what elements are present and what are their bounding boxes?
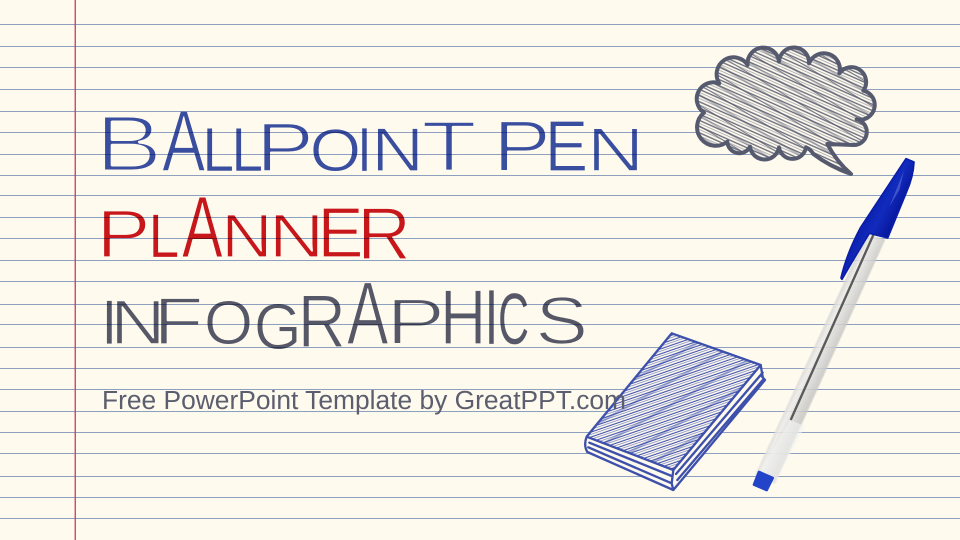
- title line: Infographics: [101, 265, 588, 364]
- ink refill: [791, 235, 873, 420]
- title line: Planner: R: [357, 192, 411, 275]
- title line: Infographics: F: [153, 283, 203, 358]
- pen cap: [841, 159, 914, 279]
- icon: scribbled book: [585, 333, 765, 490]
- title line: Infographics: I: [484, 274, 498, 361]
- title line: Planner: E: [318, 193, 364, 272]
- title line: Infographics: I: [101, 288, 118, 358]
- title line: Infographics: N: [110, 287, 166, 357]
- title line: Ballpoint Pen: T: [421, 107, 477, 187]
- title line: Ballpoint Pen: O: [310, 118, 361, 184]
- title line: Ballpoint Pen: I: [358, 115, 371, 184]
- title line: Planner: N: [221, 203, 273, 271]
- title line: Infographics: A: [347, 265, 388, 364]
- title line: Infographics: S: [535, 282, 588, 359]
- title line: Ballpoint Pen: [95, 93, 644, 190]
- title line: Infographics: P: [386, 285, 445, 358]
- title line: Ballpoint Pen: P: [493, 106, 551, 186]
- title line: Planner: [96, 178, 411, 276]
- icon: scribbled speech bubble: [697, 47, 875, 174]
- icon: ballpoint pen: [754, 159, 914, 490]
- title line: Ballpoint Pen: L: [231, 115, 263, 185]
- title line: Infographics: C: [498, 278, 529, 360]
- title line: Ballpoint Pen: P: [256, 108, 314, 186]
- title line: Ballpoint Pen: N: [587, 116, 644, 185]
- title line: Infographics: G: [254, 291, 301, 363]
- title line: Planner: P: [96, 195, 151, 272]
- title line: Infographics: R: [298, 281, 346, 364]
- title line: Planner: L: [149, 202, 179, 271]
- title line: Ballpoint Pen: N: [371, 115, 424, 185]
- title line: Ballpoint Pen: A: [162, 93, 206, 190]
- title line: Infographics: H: [440, 274, 486, 361]
- pen barrel: [755, 233, 885, 483]
- title line: Ballpoint Pen: B: [95, 99, 163, 188]
- title line: Planner: A: [182, 178, 223, 276]
- title line: Infographics: O: [204, 288, 253, 358]
- subtitle: Free PowerPoint Template by GreatPPT.com: [102, 387, 626, 415]
- title line: Ballpoint Pen: L: [202, 115, 234, 185]
- red margin line: [75, 0, 76, 540]
- pen barrel highlight near the end: [758, 420, 805, 483]
- title line: Ballpoint Pen: E: [545, 106, 588, 187]
- title line: Planner: N: [269, 202, 324, 270]
- pen end plug: [754, 472, 773, 490]
